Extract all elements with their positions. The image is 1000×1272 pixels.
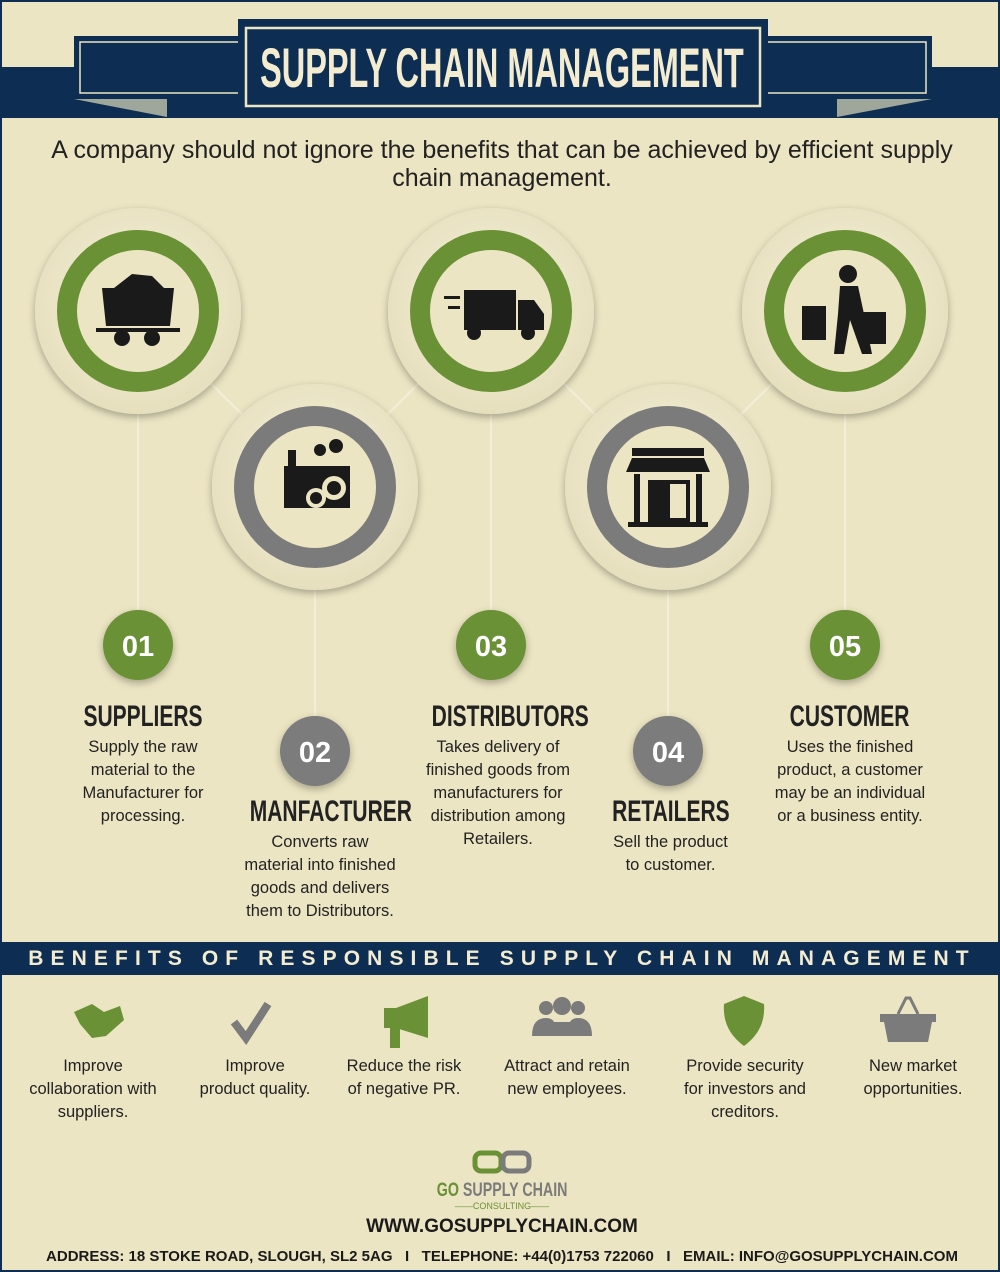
step 3 (426, 700, 589, 848)
intro text: A company should not ignore the benefits that can be achieved by efficient supply chain management. (51, 136, 953, 192)
benefit texts: collaboration with (29, 1080, 157, 1098)
text: New market (869, 1057, 957, 1075)
step 3: finished goods from (426, 761, 570, 779)
step 2 (244, 795, 412, 920)
step 1: Manufacturer for (82, 784, 204, 802)
step 1: SUPPLIERS (83, 700, 203, 733)
step 3: distribution among (431, 807, 565, 825)
chain diagram: 01 (122, 631, 154, 663)
benefit texts: Improve (63, 1057, 123, 1075)
step 4: RETAILERS (612, 795, 729, 828)
chain diagram (30, 206, 952, 794)
text: of negative PR. (348, 1080, 460, 1098)
text: for investors and (684, 1080, 806, 1098)
chain diagram: 04 (652, 737, 684, 769)
benefits bar: BENEFITS OF RESPONSIBLE SUPPLY CHAIN MANAGEMENT (28, 947, 976, 970)
step 1: Supply the raw (88, 738, 198, 756)
step 5: may be an individual (775, 784, 925, 802)
text: Improve (225, 1057, 285, 1075)
step 3: manufacturers for (433, 784, 563, 802)
step 2: Converts raw (271, 833, 369, 851)
step 1 (82, 700, 204, 825)
text: opportunities. (863, 1080, 963, 1098)
step 4: Sell the product (613, 833, 728, 851)
benefit texts: suppliers. (58, 1103, 128, 1121)
chain diagram: 02 (299, 737, 331, 769)
step 3: Retailers. (463, 830, 533, 848)
benefit texts (29, 1057, 157, 1121)
text: Provide security (686, 1057, 804, 1075)
text: Attract and retain (504, 1057, 630, 1075)
logo: ——CONSULTING—— (455, 1201, 549, 1211)
benefits bar (2, 942, 1000, 975)
step 5: product, a customer (777, 761, 923, 779)
footer contact: ADDRESS: 18 STOKE ROAD, SLOUGH, SL2 5AG I TELEPHONE: +44(0)1753 722060 I EMAIL: INFO@GOSUPPLYCHAIN.COM (46, 1248, 958, 1265)
icons (96, 265, 886, 527)
text: product quality. (200, 1080, 310, 1098)
website: WWW.GOSUPPLYCHAIN.COM (366, 1216, 638, 1237)
step 4: to customer. (626, 856, 715, 874)
text: Reduce the risk (347, 1057, 461, 1075)
text: new employees. (507, 1080, 627, 1098)
logo: GO SUPPLY CHAIN (437, 1180, 567, 1201)
step 5: or a business entity. (777, 807, 923, 825)
logo (437, 1150, 567, 1211)
step 2: material into finished (244, 856, 396, 874)
step 2: MANFACTURER (250, 795, 412, 828)
step 2: goods and delivers (251, 879, 389, 897)
step 4 (612, 795, 729, 874)
step 5 (775, 700, 925, 825)
title: SUPPLY CHAIN MANAGEMENT (260, 36, 744, 99)
step 5: Uses the finished (787, 738, 913, 756)
number badges (103, 610, 880, 786)
benefits icons (74, 996, 936, 1048)
chain diagram: 03 (475, 631, 507, 663)
step 2: them to Distributors. (246, 902, 394, 920)
step 3: Takes delivery of (437, 738, 559, 756)
chain diagram: 05 (829, 631, 861, 663)
step 5: CUSTOMER (790, 700, 910, 733)
step 1: processing. (101, 807, 185, 825)
text: creditors. (711, 1103, 779, 1121)
step 1: material to the (91, 761, 195, 779)
step 3: DISTRIBUTORS (432, 700, 589, 733)
header banner (2, 19, 998, 118)
